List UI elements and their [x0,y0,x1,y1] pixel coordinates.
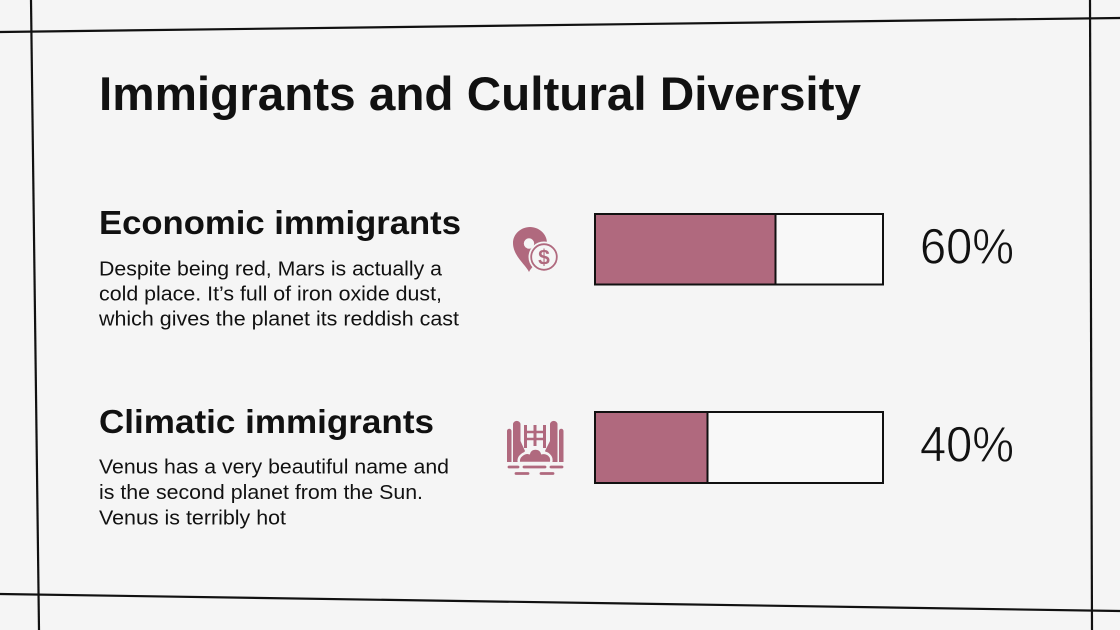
text block: climatic description [99,456,449,530]
text block: climatic description: is the second planet from the Sun. [99,481,423,504]
text block: economic description: which gives the planet its reddish cast [98,308,459,330]
text block: climatic description: Venus has a very beautiful name and [99,456,449,478]
title: Immigrants and Cultural Diversity [99,67,861,120]
icon: waterfall landscape [507,421,564,474]
bar chart: 60 percent [595,214,883,284]
heading: climatic immigrants: Climatic immigrants [99,403,434,440]
text block: economic description: cold place. It’s full of iron oxide dust, [99,282,442,306]
panel: economic immigrants [98,204,1014,330]
text block: economic description: Despite being red, Mars is actually a [99,258,443,280]
value: 60%: 60% [920,218,1014,274]
panel: climatic immigrants [99,403,1014,530]
text block: economic description [98,258,459,330]
icon: location pin with dollar [513,227,560,272]
text block: climatic description: Venus is terribly hot [99,506,286,530]
bar chart: 40 percent [595,412,883,483]
value: 40%: 40% [920,416,1014,472]
heading: economic immigrants: Economic immigrants [99,204,461,241]
icon: location pin with dollar: $ [538,246,550,270]
